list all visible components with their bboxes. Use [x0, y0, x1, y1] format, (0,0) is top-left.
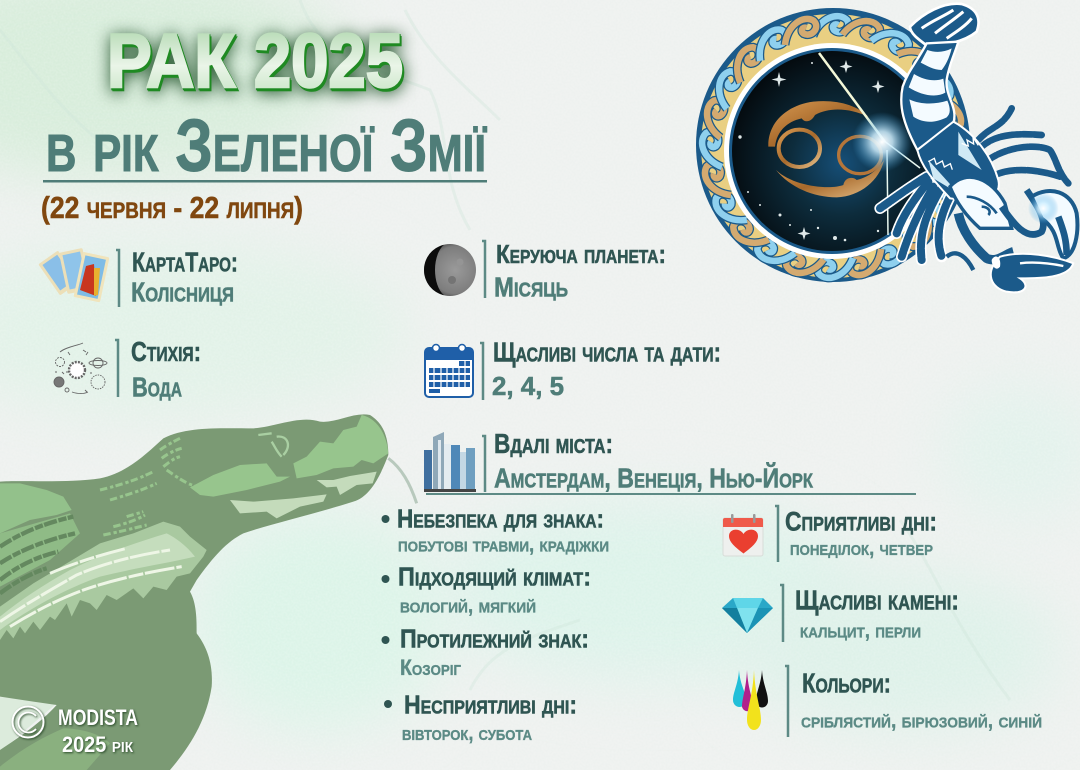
- label: Щасливі числа та дати:: [493, 336, 721, 368]
- label: Підходящий клімат:: [398, 562, 591, 592]
- icon: diamond: [722, 598, 773, 633]
- lobster right claw arm: [1002, 190, 1043, 235]
- wave ornament: [701, 15, 965, 279]
- subtitle underline: [43, 180, 487, 182]
- lobster thorax: [917, 122, 999, 202]
- label: Небезпека для знака:: [397, 504, 604, 534]
- label: КартаТаро:: [132, 246, 238, 278]
- lobster illustration: [880, 4, 1077, 292]
- snake mouth details: [230, 472, 377, 518]
- label: Протилежний знак:: [400, 624, 589, 654]
- snake neck scales: [100, 438, 197, 535]
- value: вівторок, субота: [402, 722, 532, 745]
- night sky: [732, 51, 932, 251]
- list: danger: [382, 504, 609, 556]
- icon: ink drops: [733, 670, 768, 730]
- cancer zodiac sign: [768, 101, 884, 197]
- snake eye: [258, 433, 288, 457]
- value: побутові травми, крадіжки: [398, 534, 609, 556]
- bullet: [384, 700, 392, 708]
- stars: [738, 60, 884, 241]
- value: Козоріг: [400, 655, 461, 680]
- divider: [785, 666, 788, 737]
- icon: copyright: [12, 706, 44, 738]
- lobster head: [950, 177, 1012, 228]
- outer ring: [696, 8, 970, 282]
- label: Керуюча планета:: [496, 239, 666, 269]
- list: climate: [382, 562, 591, 618]
- list: unlucky days: [384, 690, 577, 745]
- light flare: [819, 53, 920, 235]
- bullet: [382, 515, 390, 523]
- icon: calendar: [425, 344, 473, 397]
- snake illustration: [0, 414, 417, 770]
- value: Місяць: [494, 272, 568, 302]
- sign left ring: [779, 130, 820, 167]
- snake head highlights: [0, 415, 388, 587]
- list: opposite sign: [382, 624, 589, 680]
- section divider: [426, 493, 916, 495]
- label: Несприятливі дні:: [404, 690, 577, 720]
- value: 2, 4, 5: [492, 371, 564, 401]
- snake tongue: [388, 458, 417, 503]
- copyright mark: [12, 705, 138, 757]
- info: lucky days: [723, 506, 937, 562]
- value: понеділок, четвер: [790, 537, 933, 560]
- year: 2025 рік: [62, 732, 134, 757]
- sign bottom crescent: [776, 160, 884, 197]
- value: сріблястий, бірюзовий, синій: [801, 710, 1042, 732]
- snake belly scales: [0, 522, 207, 640]
- icon: cosmos doodle: [54, 343, 107, 394]
- subtitle: в рік Зеленої Змії: [46, 104, 487, 187]
- icon: skyscrapers: [424, 432, 476, 492]
- divider: [775, 506, 778, 562]
- dates: (22 червня - 22 липня): [41, 190, 303, 225]
- sign top crescent: [768, 101, 868, 147]
- lobster upper legs: [978, 108, 1068, 183]
- divider: [115, 340, 118, 397]
- info: lucky numbers: [425, 336, 721, 401]
- zodiac emblem: [696, 4, 1077, 292]
- lobster lower arm: [958, 213, 1013, 260]
- snake side stripes: [0, 517, 75, 593]
- lobster abdomen: [901, 42, 958, 150]
- value: кальцит, перли: [800, 620, 921, 642]
- info: lucky stones: [722, 584, 959, 642]
- icon: heart calendar: [723, 514, 763, 556]
- bullet: [382, 636, 390, 644]
- divider: [780, 585, 783, 642]
- divider: [116, 250, 119, 307]
- info: element: [54, 336, 201, 402]
- title: РАК 2025: [107, 19, 403, 104]
- lobster right claw: [1032, 191, 1077, 258]
- value: вологий, мягкий: [400, 594, 536, 618]
- lobster lower claw: [991, 254, 1073, 292]
- lobster lower legs: [880, 177, 950, 260]
- label: Стихія:: [131, 336, 201, 367]
- sign right ring: [839, 136, 881, 174]
- brand: MODISTA: [58, 705, 138, 730]
- lobster tail fan: [910, 4, 979, 47]
- icon: tarot cards: [38, 248, 109, 302]
- value: Амстердам, Венеція, Нью-Йорк: [494, 462, 814, 494]
- info: cities: [424, 428, 814, 494]
- divider: [482, 436, 485, 492]
- value: Колісниця: [131, 276, 234, 308]
- info: ruling planet: [424, 239, 666, 302]
- label: Щасливі камені:: [795, 584, 959, 616]
- label: Кольори:: [802, 668, 891, 698]
- snake body silhouette: [0, 414, 388, 770]
- info: colours: [733, 666, 1042, 737]
- snake lower tail scales: [0, 728, 110, 770]
- divider: [480, 343, 483, 400]
- divider: [482, 241, 485, 298]
- bullet: [382, 575, 390, 583]
- info: tarot card: [38, 246, 238, 308]
- label: Сприятливі дні:: [785, 506, 937, 536]
- icon: moon: [424, 244, 476, 296]
- label: Вдалі міста:: [494, 428, 613, 459]
- inner white ring: [724, 43, 940, 259]
- value: Вода: [132, 372, 182, 402]
